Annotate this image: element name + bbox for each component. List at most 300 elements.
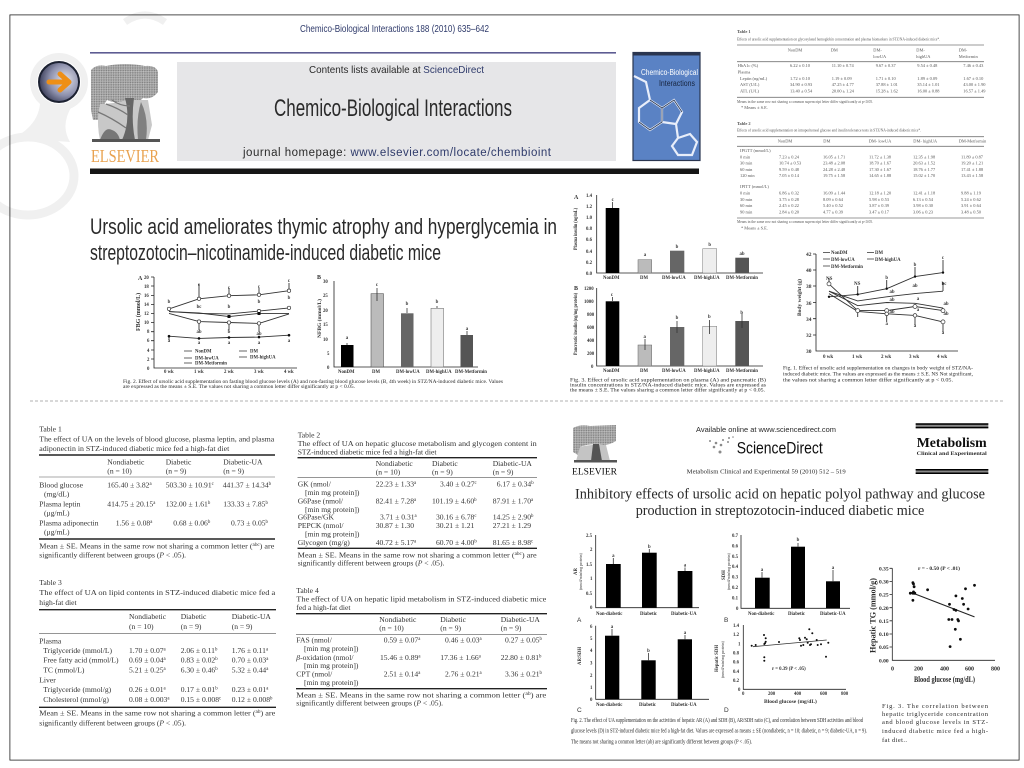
- line chart: body weight, Fig 1: ab: [912, 284, 918, 289]
- table: hepatic lipid metabolism, Table 4: [min mg protein]): [304, 644, 359, 653]
- table: blood glucose, leptin, adiponectin, Table 1: significantly different between groups (P < .05).: [39, 551, 186, 560]
- bar chart: SDH, panel B: 0: [736, 607, 739, 612]
- table: hepatic lipid metabolism, Table 4: significantly different between groups (P < .05).: [296, 699, 443, 708]
- table: hepatic glucose metabolism, Table 2: (n = 9): [493, 467, 514, 476]
- scatter plot: hepatic TG vs blood glucose, Fig 3: Blood glucose (mg/dL): [914, 674, 975, 684]
- bar chart: non-fasting glucose, Fig 2B: a: [346, 336, 349, 341]
- table: lipid contents, Table 3: b: [215, 657, 218, 662]
- bar chart: non-fasting glucose, Fig 2B: NonDM: [338, 370, 355, 375]
- table: glucose and insulin tolerance, top right Table 2: 6.86 ± 0.32: [779, 190, 799, 196]
- bar chart: AR, panel A: b: [648, 545, 651, 550]
- bar chart: SDH, panel B: 0.3: [732, 576, 739, 580]
- table: glycosylated hemoglobin, top right Table 1: 9.67 ± 0.37: [876, 63, 896, 68]
- table: glycosylated hemoglobin, top right Table 1: 6.22 ± 0.10: [790, 63, 811, 68]
- panel: journal header Chemico-Biological Interactions: [90, 23, 700, 174]
- table: glycosylated hemoglobin, top right Table 1: highUA: [916, 54, 931, 59]
- bar chart: AR, panel A: A: [577, 617, 582, 624]
- table: glucose and insulin tolerance, top right Table 2: 18.70 ± 1.67: [869, 160, 892, 166]
- table: lipid contents, Table 3: b: [215, 686, 218, 692]
- table: glucose and insulin tolerance, top right Table 2: 0 min: [740, 190, 751, 196]
- table: blood glucose, leptin, adiponectin, Table 1: c: [212, 482, 214, 487]
- bar chart: non-fasting glucose, Fig 2B: 0: [327, 366, 330, 371]
- table: glycosylated hemoglobin, top right Table 1: AST (U/L): [740, 82, 760, 87]
- bar chart: SDH, panel B: Non-diabetic: [748, 612, 775, 617]
- table: glycosylated hemoglobin, top right Table 1: DM: [831, 48, 838, 52]
- table: hepatic glucose metabolism, Table 2: a: [414, 540, 417, 544]
- line chart: body weight, Fig 1: 1 wk: [852, 355, 862, 360]
- table: glucose and insulin tolerance, top right Table 2: 3.91 ± 0.64: [961, 203, 982, 208]
- bar chart: non-fasting glucose, Fig 2B: c: [376, 283, 379, 288]
- table: glycosylated hemoglobin, top right Table 1: [737, 29, 986, 110]
- line chart: body weight, Fig 1: 2 wk: [881, 355, 891, 360]
- bar chart: AR, panel A: Diabetic-UA: [671, 612, 697, 617]
- table: lipid contents, Table 3: significantly different between groups (P < .05).: [39, 719, 186, 728]
- scatter plot: hepatic TG vs blood glucose, Fig 3: 0.05: [879, 645, 889, 651]
- bar chart: SDH, panel B: a: [832, 566, 835, 571]
- table: glucose and insulin tolerance, top right Table 2: DM- lowUA: [869, 138, 892, 144]
- scatter plot: hepatic TG vs blood glucose, Fig 3: 0.00: [879, 658, 889, 664]
- table: glucose and insulin tolerance, top right Table 2: 6.13 ± 0.54: [913, 197, 934, 202]
- table: hepatic glucose metabolism, Table 2: (n = 9): [432, 467, 453, 476]
- table: hepatic glucose metabolism, Table 2: 40.72 ± 5.17: [376, 538, 414, 547]
- line chart: fasting blood glucose, Fig 2A: a: [258, 341, 261, 346]
- table: lipid contents, Table 3: b: [215, 648, 218, 652]
- table: lipid contents, Table 3: a: [266, 657, 269, 662]
- table: hepatic lipid metabolism, Table 4: 17.36 ± 1.66: [440, 653, 479, 662]
- bar chart: AR/SDH, panel C: 3: [590, 662, 593, 666]
- bar chart: AR, panel A: 0.5: [586, 592, 593, 597]
- title: Ursolic acid paper: [90, 214, 557, 265]
- line chart: fasting blood glucose, Fig 2A: c: [258, 285, 261, 290]
- table: lipid contents, Table 3: 6.30 ± 0.46: [181, 665, 215, 674]
- line chart: body weight, Fig 1: DM-highUA: [875, 258, 901, 263]
- table: glycosylated hemoglobin, top right Table 1: 47.25 ± 4.77: [832, 82, 855, 87]
- line chart: fasting blood glucose, Fig 2A: DM-Metformin: [195, 362, 227, 366]
- line chart: body weight, Fig 1: Body weight (g): [796, 279, 803, 316]
- line chart: body weight, Fig 1: 32: [806, 333, 812, 339]
- title: Inhibitory effects paper: [575, 486, 985, 519]
- bar chart: pancreatic insulin, Fig 3B: b: [676, 316, 679, 321]
- table: blood glucose, leptin, adiponectin, Table 1: 441.37 ± 14.34: [223, 481, 269, 490]
- table: blood glucose, leptin, adiponectin, Table 1: a: [149, 482, 152, 487]
- bar chart: AR/SDH, panel C: 5: [590, 637, 593, 642]
- line chart: fasting blood glucose, Fig 2A: FBG (mmol/L): [135, 293, 142, 331]
- table: hepatic glucose metabolism, Table 2: Mean ± SE. Means in the same row not sharing a common letter (: [298, 550, 498, 559]
- table: glycosylated hemoglobin, top right Table 1: 1.67 ± 0.10: [963, 76, 984, 81]
- title: Inhibitory effects paper: Inhibitory effects of ursolic acid on hepatic polyol pathway and glucose: [575, 486, 985, 502]
- line chart: fasting blood glucose, Fig 2A: 1 wk: [194, 370, 204, 375]
- bar chart: non-fasting glucose, Fig 2B: NFBG (mmol/L): [316, 299, 323, 338]
- bar chart: non-fasting glucose, Fig 2B: DM-lowUA: [396, 370, 420, 375]
- scatter plot: hepatic SDH vs blood glucose, panel D: 400: [794, 692, 802, 697]
- table: glucose and insulin tolerance, top right Table 2: 30 min: [740, 197, 753, 202]
- table: glucose and insulin tolerance, top right Table 2: 3.48 ± 0.50: [961, 210, 982, 214]
- table: glucose and insulin tolerance, top right Table 2: 5.98 ± 0.53: [869, 197, 890, 202]
- table: blood glucose, leptin, adiponectin, Table 1: Blood glucose: [39, 481, 84, 490]
- table: glycosylated hemoglobin, top right Table 1: DM-: [959, 48, 968, 52]
- line chart: body weight, Fig 1: DM: [875, 251, 883, 256]
- table: glucose and insulin tolerance, top right Table 2: 3.47 ± 0.17: [869, 210, 890, 214]
- table: glucose and insulin tolerance, top right Table 2: 13.43 ± 1.58: [961, 173, 984, 178]
- table: lipid contents, Table 3: ab: [256, 710, 261, 715]
- bar chart: pancreatic insulin, Fig 3B: Pancreatic insulin (ng/mg protein): [574, 293, 579, 355]
- line chart: body weight, Fig 1: 38: [806, 284, 812, 290]
- table: lipid contents, Table 3: high-fat diet: [39, 598, 78, 607]
- table: lipid contents, Table 3: (n = 10): [129, 622, 154, 631]
- table: lipid contents, Table 3: Liver: [39, 675, 56, 684]
- bar chart: non-fasting glucose, Fig 2B: b: [406, 302, 409, 307]
- scatter plot: hepatic TG vs blood glucose, Fig 3: 0.15: [879, 619, 889, 625]
- background decoration: grey rings: [0, 15, 165, 215]
- table: hepatic glucose metabolism, Table 2: Diabetic-UA: [493, 459, 532, 468]
- table: glucose and insulin tolerance, top right Table 2: 60 min: [740, 203, 753, 208]
- bar chart: non-fasting glucose, Fig 2B: 25: [323, 294, 328, 299]
- line chart: fasting blood glucose, Fig 2A: 8: [147, 330, 150, 335]
- table: hepatic glucose metabolism, Table 2: c: [474, 514, 476, 519]
- line chart: body weight, Fig 1: 4 wk: [937, 355, 947, 360]
- line chart: body weight, Fig 1: a: [885, 322, 888, 327]
- line chart: fasting blood glucose, Fig 2A: b: [228, 305, 231, 310]
- caption: Fig 2 Metabolism paper: Fig. 2. The effect of UA supplementation on the activities of hepatic AR (A) and SDH (B), AR/SDH ratio (C), and correlation between SDH activities and blood: [571, 717, 864, 724]
- table: glycosylated hemoglobin, top right Table 1: 1.89 ± 0.09: [917, 76, 938, 81]
- bar chart: plasma insulin, Fig 3A: b: [676, 245, 679, 250]
- bar chart: plasma insulin, Fig 3A: ab: [739, 252, 745, 257]
- table: hepatic glucose metabolism, Table 2: (n = 10): [376, 467, 401, 476]
- table: hepatic lipid metabolism, Table 4: 0.46 ± 0.03: [445, 636, 480, 645]
- masthead panel: Contents lists available at ScienceDirect: [309, 64, 484, 76]
- scatter plot: hepatic TG vs blood glucose, Fig 3: 400: [940, 666, 949, 672]
- table: glycosylated hemoglobin, top right Table 1: 1.19 ± 0.09: [832, 76, 852, 81]
- line chart: fasting blood glucose, Fig 2A: 16: [144, 294, 149, 299]
- table: hepatic glucose metabolism, Table 2: G6Pase (nmol/: [298, 496, 344, 505]
- bar chart: pancreatic insulin, Fig 3B: 1200: [584, 287, 594, 292]
- table: glycosylated hemoglobin, top right Table 1: DM-: [873, 48, 882, 52]
- line chart: fasting blood glucose, Fig 2A: DM-lowUA: [195, 356, 219, 362]
- line chart: fasting blood glucose, Fig 2A: A: [138, 276, 143, 282]
- table: hepatic lipid metabolism, Table 4: [min mg protein]): [304, 661, 359, 670]
- table: lipid contents, Table 3: 2.06 ± 0.11: [181, 646, 215, 655]
- table: blood glucose, leptin, adiponectin, Table 1: Plasma leptin: [39, 499, 81, 508]
- table: blood glucose, leptin, adiponectin, Table 1: Plasma adiponectin: [39, 518, 99, 527]
- line chart: fasting blood glucose, Fig 2A: c: [198, 283, 201, 288]
- table: lipid contents, Table 3: a: [164, 648, 167, 652]
- table: glucose and insulin tolerance, top right Table 2: 12.18 ± 1.20: [869, 190, 892, 196]
- caption: Fig 1 first paper: the values not sharing a common letter differ significantly at p < 0.05.: [783, 376, 953, 384]
- bar chart: non-fasting glucose, Fig 2B: B: [317, 275, 321, 281]
- table: blood glucose, leptin, adiponectin, Table 1: (μg/mL): [44, 527, 70, 536]
- table: glycosylated hemoglobin, top right Table 1: NonDM: [788, 48, 802, 52]
- table: lipid contents, Table 3: Diabetic-UA: [232, 612, 271, 621]
- table: hepatic glucose metabolism, Table 2: Diabetic: [432, 459, 458, 468]
- bar chart: plasma insulin, Fig 3A: Plasma insulin (ng/mL): [574, 208, 579, 250]
- table: blood glucose, leptin, adiponectin, Table 1: b: [265, 501, 268, 506]
- table: glucose and insulin tolerance, top right Table 2: 23.48 ± 2.08: [823, 160, 846, 166]
- scatter plot: hepatic SDH vs blood glucose, panel D: 1: [738, 642, 741, 648]
- caption: Fig 2 Metabolism paper: The means not sharing a common letter (ab) are significantly different between groups (P < .05).: [571, 738, 752, 746]
- table: lipid contents, Table 3: 0.26 ± 0.01: [129, 685, 164, 694]
- table: lipid contents, Table 3: Free fatty acid (mmol/L): [43, 656, 119, 665]
- bar chart: SDH, panel B: [722, 534, 850, 624]
- caption: Fig 3 Metabolism paper: [882, 703, 989, 744]
- bar chart: AR/SDH, panel C: 0: [590, 698, 593, 703]
- bar chart: pancreatic insulin, Fig 3B: c: [611, 293, 614, 298]
- bar chart: pancreatic insulin, Fig 3B: b: [708, 315, 711, 320]
- journal citation: Chemico-Biological Interactions 188 (2010) 635–642: [300, 23, 489, 35]
- bar chart: non-fasting glucose, Fig 2B: 15: [323, 323, 328, 328]
- line chart: fasting blood glucose, Fig 2A: b: [168, 300, 171, 305]
- line chart: fasting blood glucose, Fig 2A: DM-highUA: [250, 356, 276, 360]
- table: lipid contents, Table 3: a: [164, 686, 167, 692]
- table: lipid contents, Table 3: a: [164, 667, 167, 672]
- table: lipid contents, Table 3: 1.76 ± 0.11: [232, 646, 266, 655]
- title: Ursolic acid paper: Ursolic acid ameliorates thymic atrophy and hyperglycemia in: [90, 214, 557, 239]
- table: glucose and insulin tolerance, top right Table 2: 12.35 ± 1.98: [913, 154, 936, 160]
- line chart: body weight, Fig 1: 0 wk: [823, 355, 833, 360]
- table: hepatic glucose metabolism, Table 2: b: [474, 540, 477, 544]
- table: hepatic glucose metabolism, Table 2: 3.40 ± 0.27: [440, 480, 475, 489]
- logo: Metabolism: [916, 423, 988, 474]
- table: glycosylated hemoglobin, top right Table 1: 43.00 ± 1.90: [963, 82, 986, 87]
- line chart: body weight, Fig 1: 42: [806, 252, 812, 258]
- line chart: body weight, Fig 1: 34: [806, 317, 812, 323]
- table: hepatic glucose metabolism, Table 2: [min mg protein]): [305, 488, 360, 497]
- table: glycosylated hemoglobin, top right Table 1: 16.00 ± 0.88: [917, 88, 940, 94]
- bar chart: non-fasting glucose, Fig 2B: 5: [327, 352, 330, 357]
- bar chart: SDH, panel B: 0.7: [732, 534, 739, 539]
- table: glycosylated hemoglobin, top right Table 1: 13.40 ± 0.54: [790, 88, 813, 94]
- scatter plot: hepatic SDH vs blood glucose, panel D: 0.6: [733, 660, 740, 666]
- table: hepatic lipid metabolism, Table 4: (n = 10): [379, 623, 404, 632]
- table: hepatic glucose metabolism, Table 2: 27.21 ± 1.29: [493, 521, 531, 530]
- table: lipid contents, Table 3: 0.15 ± 0.008: [181, 695, 219, 704]
- logo: Metabolism: Metabolism: [917, 436, 987, 451]
- table: hepatic glucose metabolism, Table 2: a: [531, 498, 534, 503]
- table: glucose and insulin tolerance, top right Table 2: 7.05 ± 0.14: [779, 173, 800, 178]
- bar chart: plasma insulin, Fig 3A: [574, 194, 763, 281]
- table: lipid contents, Table 3: b: [270, 696, 273, 702]
- line chart: fasting blood glucose, Fig 2A: b: [258, 300, 261, 305]
- table: blood glucose, leptin, adiponectin, Table 1: (n = 10): [107, 467, 132, 476]
- table: glucose and insulin tolerance, top right Table 2: 20.63 ± 1.52: [913, 160, 935, 166]
- table: hepatic glucose metabolism, Table 2: GK (nmol/: [298, 480, 332, 489]
- icon: journal cover: Interactions: [659, 79, 695, 88]
- table: blood glucose, leptin, adiponectin, Table 1: Mean ± SE. Means in the same row not sharing a common letter (: [39, 541, 239, 550]
- table: hepatic lipid metabolism, Table 4: 22.80 ± 0.81: [501, 653, 539, 662]
- table: glucose and insulin tolerance, top right Table 2: 24.28 ± 2.48: [823, 167, 846, 172]
- table: lipid contents, Table 3: 0.83 ± 0.02: [181, 656, 215, 665]
- bar chart: SDH, panel B: 0.1: [732, 596, 739, 602]
- scatter plot: hepatic SDH vs blood glucose, panel D: 0.2: [733, 679, 740, 684]
- line chart: body weight, Fig 1: DM-lowUA: [831, 258, 855, 263]
- line chart: body weight, Fig 1: ab: [889, 290, 895, 295]
- bar chart: pancreatic insulin, Fig 3B: 0: [591, 365, 594, 370]
- table: lipid contents, Table 3: (n = 9): [181, 622, 202, 631]
- scatter plot: hepatic TG vs blood glucose, Fig 3: 800: [991, 666, 1000, 672]
- table: glycosylated hemoglobin, top right Table 1: 34.90 ± 0.93: [790, 82, 813, 87]
- table: glucose and insulin tolerance, top right Table 2: 3.87 ± 0.39: [869, 203, 890, 208]
- bar chart: SDH, panel B: 0.6: [732, 544, 739, 550]
- table: glycosylated hemoglobin, top right Table 1: Plasma: [738, 70, 750, 74]
- line chart: fasting blood glucose, Fig 2A: a: [168, 339, 171, 344]
- table: hepatic glucose metabolism, Table 2: PEPCK (nmol/: [298, 521, 344, 530]
- table: blood glucose, leptin, adiponectin, Table 1: 503.30 ± 10.91: [166, 481, 212, 490]
- table: glycosylated hemoglobin, top right Table 1: 37.88 ± 1.01: [876, 82, 898, 87]
- bar chart: pancreatic insulin, Fig 3B: 600: [587, 326, 595, 331]
- table: lipid contents, Table 3: 0.17 ± 0.01: [181, 685, 215, 694]
- table: hepatic lipid metabolism, Table 4: [min mg protein]): [304, 678, 359, 687]
- table: lipid contents, Table 3: TC (mmol/L): [43, 665, 85, 674]
- table: glucose and insulin tolerance, top right Table 2: 5.40 ± 0.52: [823, 203, 843, 208]
- line chart: fasting blood glucose, Fig 2A: 10: [144, 321, 149, 326]
- table: lipid contents, Table 3: a: [167, 696, 170, 702]
- bar chart: pancreatic insulin, Fig 3B: 800: [587, 313, 595, 318]
- table: lipid contents, Table 3: Triglyceride (mmol/L): [43, 646, 112, 655]
- table: glucose and insulin tolerance, top right Table 2: [737, 121, 987, 230]
- bar chart: pancreatic insulin, Fig 3B: 1000: [584, 300, 594, 305]
- table: glucose and insulin tolerance, top right Table 2: 3.98 ± 0.30: [913, 203, 934, 208]
- table: hepatic lipid metabolism, Table 4: ab: [525, 692, 531, 697]
- line chart: fasting blood glucose, Fig 2A: 3 wk: [254, 370, 264, 375]
- table: hepatic lipid metabolism, Table 4: 2.51 ± 0.14: [384, 670, 418, 679]
- table: lipid contents, Table 3: Triglyceride (mmol/g): [43, 685, 112, 694]
- table: blood glucose, leptin, adiponectin, Table 1: abc: [253, 543, 260, 548]
- table: glycosylated hemoglobin, top right Table 1: 35.14 ± 1.01: [917, 82, 939, 87]
- bar chart: non-fasting glucose, Fig 2B: DM-highUA: [426, 370, 452, 375]
- table: blood glucose, leptin, adiponectin, Table 1: [39, 425, 275, 560]
- icon: small Elsevier tree logo: ELSEVIER: [572, 467, 618, 477]
- table: hepatic glucose metabolism, Table 2: 30.16 ± 6.78: [436, 513, 474, 522]
- bar chart: AR, panel A: Non-diabetic: [596, 612, 623, 617]
- scatter plot: hepatic TG vs blood glucose, Fig 3: Hepatic TG (mmol/g): [868, 578, 878, 653]
- bar chart: plasma insulin, Fig 3A: A: [574, 195, 579, 201]
- bar chart: pancreatic insulin, Fig 3B: NonDM: [603, 369, 620, 374]
- bar chart: AR/SDH, panel C: 6: [590, 625, 593, 630]
- table: hepatic glucose metabolism, Table 2: [298, 430, 537, 568]
- table: glucose and insulin tolerance, top right Table 2: IPGTT (mmol/L): [740, 148, 771, 153]
- bar chart: pancreatic insulin, Fig 3B: DM-highUA: [694, 369, 720, 374]
- bar chart: non-fasting glucose, Fig 2B: DM-Metformin: [455, 370, 487, 375]
- table: blood glucose, leptin, adiponectin, Table 1: (n = 9): [166, 467, 187, 476]
- scatter plot: hepatic SDH vs blood glucose, panel D: 600: [820, 692, 828, 697]
- table: blood glucose, leptin, adiponectin, Table 1: 132.00 ± 1.61: [166, 499, 208, 508]
- bar chart: pancreatic insulin, Fig 3B: a: [643, 335, 646, 340]
- table: hepatic glucose metabolism, Table 2: b: [474, 498, 477, 503]
- line chart: body weight, Fig 1: a: [942, 331, 945, 336]
- caption: Fig 2 first paper: Fig. 2. Effect of ursolic acid supplementation on fasting blood glucose levels (A) and non-fasting blood glucose levels (B, 4th week) in STZ/NA-induced diabetic mice. Values: [123, 380, 503, 385]
- table: lipid contents, Table 3: 0.23 ± 0.01: [232, 685, 266, 694]
- table: hepatic glucose metabolism, Table 2: 30.87 ± 1.30: [376, 521, 414, 530]
- table: hepatic glucose metabolism, Table 2: a: [415, 514, 418, 519]
- table: glucose and insulin tolerance, top right Table 2: 15.02 ± 1.70: [913, 173, 936, 178]
- table: glucose and insulin tolerance, top right Table 2: 3.06 ± 0.23: [913, 210, 934, 214]
- table: glucose and insulin tolerance, top right Table 2: Means in the same row not sharing a common superscript letter differ significantly at p<0.05.: [737, 219, 873, 224]
- bar chart: plasma insulin, Fig 3A: 1.0: [586, 216, 593, 221]
- line chart: fasting blood glucose, Fig 2A: [135, 276, 297, 375]
- bar chart: AR/SDH, panel C: Diabetic: [639, 703, 657, 708]
- line chart: body weight, Fig 1: a: [914, 324, 917, 329]
- bar chart: SDH, panel B: 0.5: [732, 555, 739, 560]
- caption: Fig 2 Metabolism paper: [571, 717, 867, 746]
- bar chart: SDH, panel B: b: [797, 538, 800, 543]
- table: hepatic lipid metabolism, Table 4: Diabetic: [440, 615, 467, 624]
- line chart: fasting blood glucose, Fig 2A: 2: [147, 358, 150, 363]
- line chart: body weight, Fig 1: b: [914, 263, 917, 268]
- table: glycosylated hemoglobin, top right Table 1: Metformin: [959, 54, 979, 59]
- table: glucose and insulin tolerance, top right Table 2: 16.05 ± 1.71: [823, 154, 845, 160]
- bar chart: pancreatic insulin, Fig 3B: DM: [640, 369, 648, 374]
- panel: Metabolism journal header: ScienceDirect: [737, 438, 823, 457]
- line chart: body weight, Fig 1: [796, 251, 958, 360]
- table: hepatic lipid metabolism, Table 4: b: [540, 637, 543, 642]
- table: blood glucose, leptin, adiponectin, Table 1: 0.73 ± 0.05: [231, 518, 266, 527]
- table: blood glucose, leptin, adiponectin, Table 1: 1.56 ± 0.08: [116, 518, 150, 527]
- table: lipid contents, Table 3: 0.12 ± 0.008: [232, 695, 270, 704]
- scatter plot: hepatic TG vs blood glucose, Fig 3: [868, 565, 1000, 684]
- line chart: body weight, Fig 1: 3 wk: [909, 355, 919, 360]
- table: blood glucose, leptin, adiponectin, Table 1: 0.68 ± 0.06: [173, 518, 208, 527]
- table: hepatic lipid metabolism, Table 4: Diabetic-UA: [501, 615, 540, 624]
- caption: Fig 3 first paper: insulin concentrations in STZ/NA-induced diabetic mice. Values are expressed as: [570, 384, 766, 388]
- line chart: body weight, Fig 1: NS: [826, 277, 833, 282]
- caption: Fig 3 Metabolism paper: and blood glucose levels in STZ-: [882, 719, 988, 726]
- scatter plot: hepatic SDH vs blood glucose, panel D: 0: [742, 692, 745, 697]
- masthead panel: journal homepage: www.elsevier.com/locate/chembioint: [242, 147, 552, 159]
- icon: journal cover: Chemico-Biological: [641, 68, 698, 77]
- scatter plot: hepatic SDH vs blood glucose, panel D: (nmol/min/mg protein): [720, 641, 725, 678]
- table: hepatic glucose metabolism, Table 2: G6Pase/GK: [298, 513, 334, 522]
- table: hepatic lipid metabolism, Table 4: CPT (nmol/: [296, 670, 333, 679]
- panel: Metabolism journal header: Available online at www.sciencedirect.com: [696, 425, 836, 434]
- table: hepatic glucose metabolism, Table 2: 82.41 ± 7.28: [376, 496, 414, 505]
- bar chart: pancreatic insulin, Fig 3B: B: [574, 286, 578, 292]
- table: hepatic glucose metabolism, Table 2: a: [414, 481, 417, 486]
- bar chart: non-fasting glucose, Fig 2B: b: [436, 300, 439, 305]
- table: glucose and insulin tolerance, top right Table 2: 16.09 ± 1.44: [823, 190, 846, 196]
- scatter plot: hepatic TG vs blood glucose, Fig 3: 0: [891, 666, 894, 672]
- scatter plot: hepatic TG vs blood glucose, Fig 3: 600: [965, 666, 974, 672]
- bar chart: plasma insulin, Fig 3A: 0.2: [586, 261, 593, 266]
- table: glucose and insulin tolerance, top right Table 2: 17.30 ± 1.67: [869, 167, 892, 172]
- table: glycosylated hemoglobin, top right Table 1: Table 1: [737, 29, 751, 34]
- table: blood glucose, leptin, adiponectin, Table 1: 165.40 ± 3.82: [107, 481, 149, 490]
- table: lipid contents, Table 3: [39, 578, 276, 728]
- bar chart: pancreatic insulin, Fig 3B: [574, 286, 763, 374]
- caption: Fig 2 first paper: [123, 380, 503, 390]
- bar chart: AR/SDH, panel C: 2: [590, 674, 593, 679]
- icon: Elsevier tree logo: ELSEVIER: [91, 146, 159, 166]
- logo: Metabolism: Clinical and Experimental: [917, 451, 987, 457]
- scatter plot: hepatic SDH vs blood glucose, panel D: 0.8: [733, 652, 740, 656]
- bar chart: plasma insulin, Fig 3A: 0.8: [586, 227, 593, 232]
- scatter plot: hepatic TG vs blood glucose, Fig 3: 0.35: [879, 566, 889, 572]
- bar chart: plasma insulin, Fig 3A: 1.4: [586, 194, 593, 199]
- panel: Metabolism journal header: [572, 423, 988, 477]
- caption: Fig 3 first paper: [570, 378, 767, 394]
- table: blood glucose, leptin, adiponectin, Table 1: b: [208, 501, 211, 506]
- table: glucose and insulin tolerance, top right Table 2: 8.09 ± 0.64: [823, 197, 844, 202]
- table: lipid contents, Table 3: a: [266, 667, 269, 672]
- table: glucose and insulin tolerance, top right Table 2: 60 min: [740, 167, 753, 172]
- line chart: fasting blood glucose, Fig 2A: 6: [147, 339, 150, 344]
- line chart: fasting blood glucose, Fig 2A: 18: [144, 285, 149, 290]
- table: blood glucose, leptin, adiponectin, Table 1: Table 1: [39, 425, 62, 434]
- table: blood glucose, leptin, adiponectin, Table 1: b: [269, 482, 272, 487]
- line chart: body weight, Fig 1: NonDM: [831, 251, 848, 256]
- table: lipid contents, Table 3: 0.08 ± 0.003: [129, 695, 167, 704]
- table: glucose and insulin tolerance, top right Table 2: 11.72 ± 1.38: [869, 154, 892, 160]
- table: glycosylated hemoglobin, top right Table 1: Means in the same row not sharing a common superscript letter differ significantly at p<0.05.: [737, 99, 873, 104]
- title: Ursolic acid paper: streptozotocin–nicotinamide-induced diabetic mice: [90, 240, 441, 265]
